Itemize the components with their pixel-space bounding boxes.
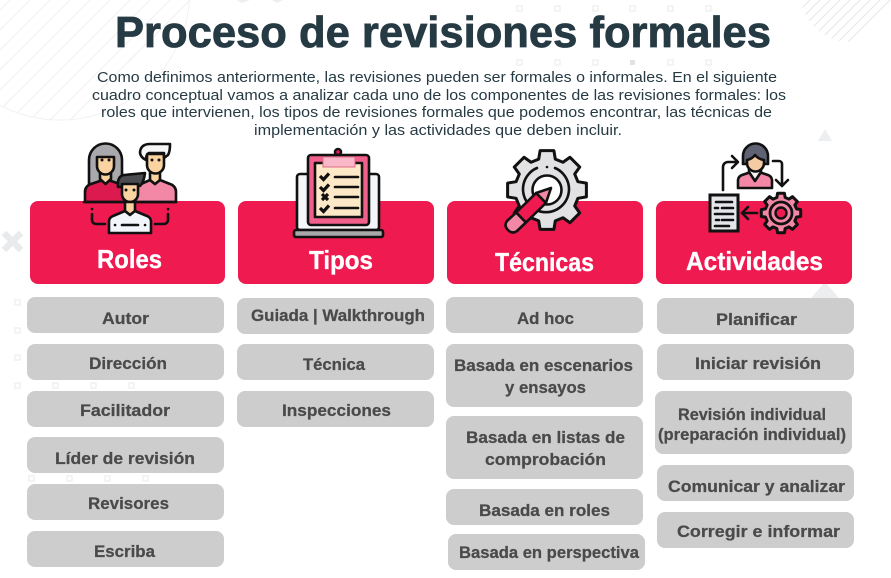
- list: tecnicas: comprobación: [485, 450, 606, 469]
- list: tipos: Técnica: [303, 355, 366, 374]
- list: roles: [27, 297, 224, 567]
- list: roles: Facilitador: [80, 401, 170, 420]
- panel: tipos header: Tipos: [309, 245, 373, 275]
- list: tipos: Inspecciones: [282, 401, 391, 420]
- list: roles: Revisores: [88, 494, 169, 513]
- list: tipos: Guiada | Walkthrough: [251, 306, 425, 325]
- intro text: implementación y las actividades que deben incluir.: [254, 123, 622, 139]
- list: roles: Autor: [102, 309, 149, 328]
- panel: roles header: Roles: [97, 244, 162, 274]
- list: roles: Escriba: [94, 542, 156, 561]
- list: tecnicas: y ensayos: [505, 378, 586, 397]
- intro text: Como definimos anteriormente, las revisiones pueden ser formales o informales. En el siguiente: [97, 70, 777, 86]
- title: Proceso de revisiones formales: [115, 8, 771, 57]
- panel: tecnicas header: [447, 201, 643, 284]
- list: actividades: [655, 298, 854, 548]
- panel: roles header: [30, 201, 225, 284]
- list: tipos: [237, 298, 434, 427]
- list: actividades: Revisión individual: [678, 405, 826, 424]
- icon: gear with pencil: [506, 151, 586, 232]
- list: roles: Líder de revisión: [55, 449, 195, 468]
- icon: person, document and gear cycle: [710, 144, 801, 233]
- intro text: cuadro conceptual vamos a analizar cada uno de los componentes de las revisiones formales: los: [92, 88, 786, 104]
- icon: clipboard on laptop: [294, 149, 383, 237]
- list: tecnicas: Basada en listas de: [466, 428, 625, 447]
- list: tecnicas: [446, 297, 645, 570]
- intro text: [92, 70, 786, 139]
- list: roles: Dirección: [89, 354, 167, 373]
- list: tecnicas: Basada en escenarios: [454, 356, 633, 375]
- intro text: roles que intervienen, los tipos de revisiones formales que podemos encontrar, las técnicas de: [101, 105, 772, 121]
- list: tecnicas: Basada en roles: [479, 501, 610, 520]
- panel: actividades header: [656, 201, 852, 284]
- icon: people team: [84, 144, 176, 233]
- list: actividades: Corregir e informar: [677, 522, 840, 541]
- panel: tecnicas header: Técnicas: [495, 247, 594, 277]
- list: actividades: Planificar: [716, 310, 797, 329]
- panel: tipos header: [238, 201, 434, 284]
- list: tecnicas: Basada en perspectiva: [459, 543, 640, 562]
- panel: actividades header: Actividades: [686, 246, 823, 276]
- list: actividades: Comunicar y analizar: [668, 477, 845, 496]
- list: actividades: (preparación individual): [658, 425, 846, 444]
- list: tecnicas: Ad hoc: [517, 309, 574, 328]
- list: actividades: Iniciar revisión: [695, 354, 821, 373]
